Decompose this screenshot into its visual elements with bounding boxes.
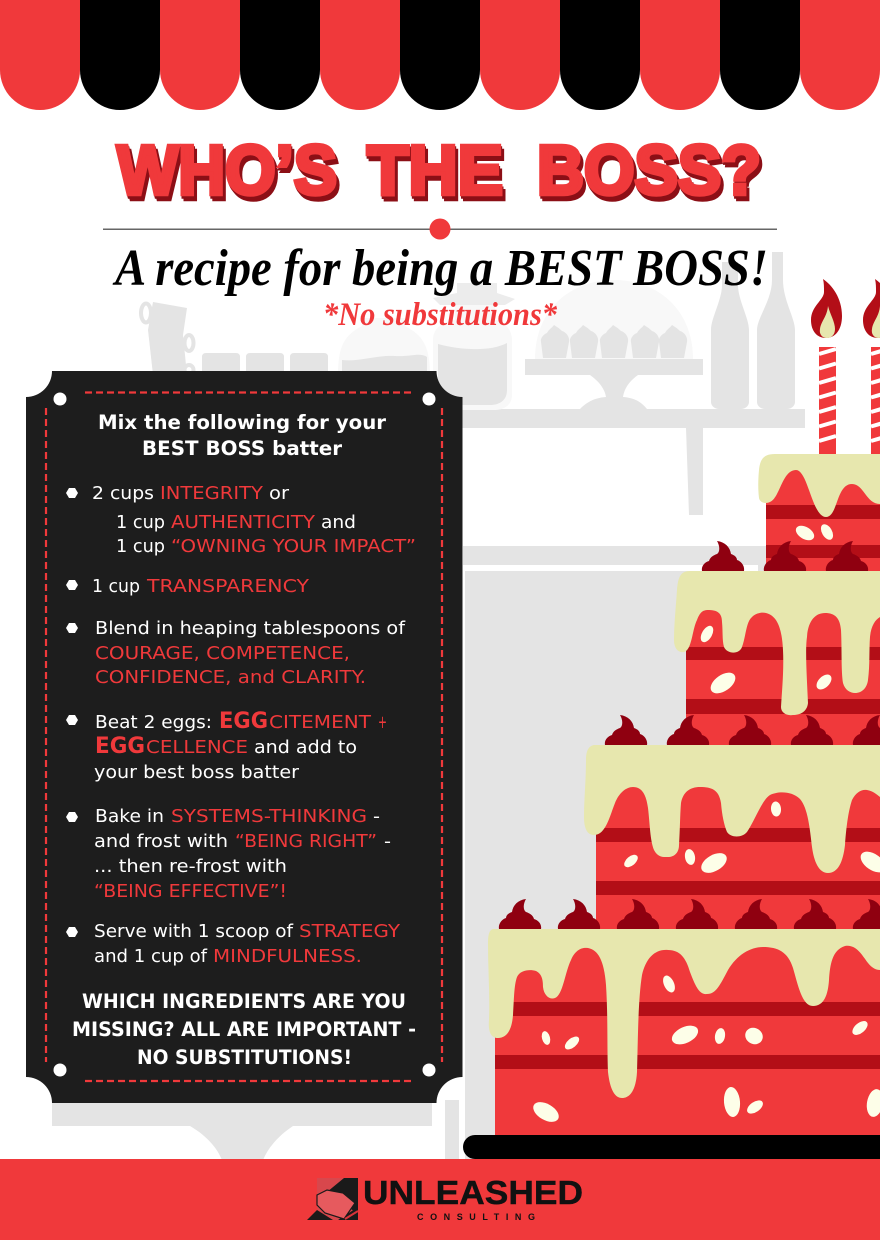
title: WHO’S <box>120 136 340 214</box>
ingredient: courage: Blend in heaping tablespoons of <box>95 618 406 639</box>
tier 4 <box>488 929 880 1138</box>
subtitle: A recipe for being a BEST BOSS! <box>112 240 768 297</box>
ingredient: systems-thinking <box>66 806 391 902</box>
ingredient: integrity: and <box>321 512 356 533</box>
cake plate <box>463 1135 880 1159</box>
ingredient: eggs: + <box>378 712 387 733</box>
card heading <box>98 411 386 460</box>
dollops tier 2 <box>702 541 868 571</box>
title <box>117 131 764 214</box>
ingredient: eggs <box>66 708 387 783</box>
ingredient: courage: COURAGE, COMPETENCE, <box>95 643 350 664</box>
ingredient: eggs: CITEMENT <box>269 712 372 733</box>
ingredient: transparency <box>66 576 310 597</box>
counter band and cabinet <box>445 546 766 1161</box>
ingredient: eggs: EGG <box>95 733 145 759</box>
closing question <box>72 990 416 1069</box>
card heading: Mix the following for your <box>98 411 386 434</box>
footer band <box>0 1159 880 1240</box>
ingredient: systems-thinking: Bake in <box>95 806 164 827</box>
ingredient: integrity <box>66 483 416 557</box>
ingredient: eggs: Beat 2 eggs: <box>95 712 212 733</box>
logo subtitle: CONSULTING <box>417 1212 535 1222</box>
title: THE <box>368 134 504 212</box>
ingredient: courage: CONFIDENCE, and CLARITY. <box>95 667 366 688</box>
cake <box>463 279 880 1159</box>
tagline: *No substitutions* <box>323 297 557 333</box>
lower stand under panel <box>52 1100 432 1160</box>
ingredient: integrity: 1 cup <box>116 536 165 557</box>
shelf with bottles <box>440 252 805 515</box>
ingredient: systems-thinking: SYSTEMS-THINKING <box>171 806 367 827</box>
logo icon <box>307 1178 358 1220</box>
ingredient: eggs: and add to <box>254 737 357 758</box>
ingredient: systems-thinking: ... then re-frost with <box>94 856 287 877</box>
title: THE <box>367 131 503 209</box>
candles <box>811 279 880 455</box>
ingredient: integrity: or <box>269 483 290 504</box>
closing question: MISSING? ALL ARE IMPORTANT - <box>72 1018 416 1041</box>
ingredient: strategy: and 1 cup of <box>94 946 208 967</box>
closing question: WHICH INGREDIENTS ARE YOU <box>82 990 406 1013</box>
title: BOSS? <box>540 136 764 214</box>
ingredient: strategy: MINDFULNESS. <box>213 946 362 967</box>
jars <box>338 283 515 410</box>
ingredient: eggs: CELLENCE <box>146 737 248 758</box>
logo wordmark: UNLEASHED <box>363 1175 583 1212</box>
dollops tier 4 <box>499 899 880 929</box>
ingredient: systems-thinking: “BEING RIGHT” <box>235 831 377 852</box>
tier 3 <box>584 745 880 930</box>
title: THE <box>370 136 506 214</box>
title: WHO’S <box>118 134 338 212</box>
ingredient: courage <box>66 618 406 688</box>
divider with dot <box>103 218 777 240</box>
ingredient: systems-thinking: - <box>373 806 380 827</box>
ingredient: transparency: TRANSPARENCY <box>146 576 310 597</box>
ingredient: systems-thinking: “BEING EFFECTIVE”! <box>94 881 287 902</box>
background: kitchen shelves <box>52 252 805 1161</box>
ingredient: strategy: Serve with 1 scoop of <box>94 921 294 942</box>
ingredient: strategy <box>66 921 401 967</box>
ingredient: strategy: STRATEGY <box>299 921 401 942</box>
ingredient: integrity: “OWNING YOUR IMPACT” <box>171 536 416 557</box>
tier 1 <box>758 454 880 574</box>
cake stand with cupcakes under a dome <box>525 280 703 409</box>
ingredient: integrity: 2 cups <box>92 483 154 504</box>
awning <box>0 0 880 110</box>
title: WHO’S <box>117 131 337 209</box>
ingredient: integrity: INTEGRITY <box>160 483 264 504</box>
dollops tier 3 <box>605 715 880 745</box>
ingredient: systems-thinking: - <box>384 831 391 852</box>
ingredient: transparency: 1 cup <box>92 576 140 597</box>
tier 2 <box>674 571 880 747</box>
cups and glasses <box>141 302 328 375</box>
ingredient: systems-thinking: and frost with <box>94 831 228 852</box>
card heading: BEST BOSS batter <box>142 437 342 460</box>
logo <box>307 1175 583 1222</box>
panel: recipe card <box>26 371 462 1103</box>
ingredient: eggs: your best boss batter <box>94 762 300 783</box>
ingredient: integrity: 1 cup <box>116 512 165 533</box>
card background <box>26 371 462 1103</box>
ingredient: integrity: AUTHENTICITY <box>171 512 316 533</box>
ingredient: eggs: EGG <box>219 708 268 734</box>
title: BOSS? <box>538 134 762 212</box>
closing question: NO SUBSTITUTIONS! <box>137 1046 352 1069</box>
title: BOSS? <box>537 131 761 209</box>
